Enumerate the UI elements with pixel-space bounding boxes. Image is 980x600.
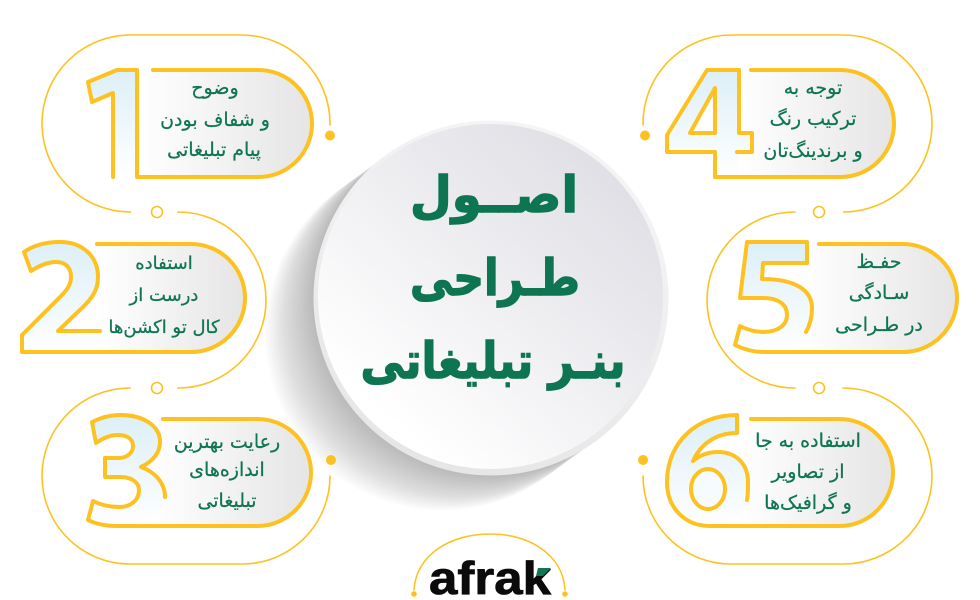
text 3 <box>174 431 280 512</box>
text 1: پیام تبلیغاتی <box>167 139 261 161</box>
pill 4 <box>739 70 894 177</box>
title: اصــول <box>410 166 578 225</box>
panel 2 <box>22 212 266 388</box>
text 2: کال تو اکشن‌ها <box>108 317 220 338</box>
title <box>360 166 626 391</box>
dot 4 <box>640 130 650 140</box>
logo green accent <box>536 568 551 576</box>
text 2 <box>108 253 220 338</box>
logo <box>411 534 568 600</box>
text 4 <box>763 77 863 162</box>
text 4: و برندینگ‌تان <box>763 140 863 162</box>
text 1: و شفاف بودن <box>160 109 270 131</box>
pill 2 <box>97 244 245 352</box>
text 6: استفاده به جا <box>755 430 861 452</box>
text 3: رعایت بهترین <box>174 431 280 453</box>
pill 3 <box>150 419 311 526</box>
text 5: حفـظ <box>857 251 901 273</box>
panel 5 <box>707 212 957 388</box>
panel 3 <box>42 388 336 564</box>
title: بنـر تبلیغاتی <box>360 332 626 391</box>
connector outline 2 <box>178 212 266 388</box>
panel 6 <box>638 388 932 564</box>
small connector circle 1-2 <box>152 206 162 218</box>
text 5 <box>835 251 923 336</box>
text 3: تبلیغاتی <box>197 490 257 512</box>
number 3 <box>88 415 311 526</box>
text 4: ترکیب رنگ <box>770 108 856 130</box>
panel 4 <box>640 35 932 212</box>
dot 3 <box>326 455 336 465</box>
pill 1 <box>137 70 312 177</box>
number 4 <box>667 70 894 177</box>
text 5: در طـراحی <box>835 314 923 336</box>
logo arc <box>414 534 565 590</box>
title: طـراحی <box>410 249 580 308</box>
text 6: و گرافیک‌ها <box>764 491 852 514</box>
text 6: از تصاویر <box>770 461 844 483</box>
pill 6 <box>740 419 893 526</box>
connector outline 3 <box>42 388 330 564</box>
text 3: اندازه‌های <box>189 459 265 481</box>
number 1 <box>88 70 312 177</box>
small connector circle 4-5 <box>814 206 824 218</box>
text 4: توجه به <box>784 77 842 99</box>
connector outline 4 <box>643 35 932 212</box>
text 1 <box>160 77 270 161</box>
long shadow of centre circle <box>265 123 666 510</box>
dot 1 <box>325 130 335 140</box>
text 1: وضوح <box>191 77 239 99</box>
small connector circle 5-6 <box>814 382 824 394</box>
text 6 <box>755 430 861 514</box>
text 5: سـادگی <box>849 281 909 304</box>
dot 6 <box>638 455 648 465</box>
centre circle with title <box>314 120 668 476</box>
pill 5 <box>800 244 957 352</box>
text 2: درست از <box>129 285 198 306</box>
text 2: استفاده <box>135 253 193 274</box>
number 5 <box>735 242 957 352</box>
connector outline 5 <box>707 212 795 388</box>
number 2 <box>22 242 245 352</box>
connector outline 1 <box>42 35 330 212</box>
panel 1 <box>42 35 335 212</box>
number 6 <box>667 415 893 526</box>
connector outline 6 <box>643 388 932 564</box>
small connector circle 2-3 <box>152 382 162 394</box>
